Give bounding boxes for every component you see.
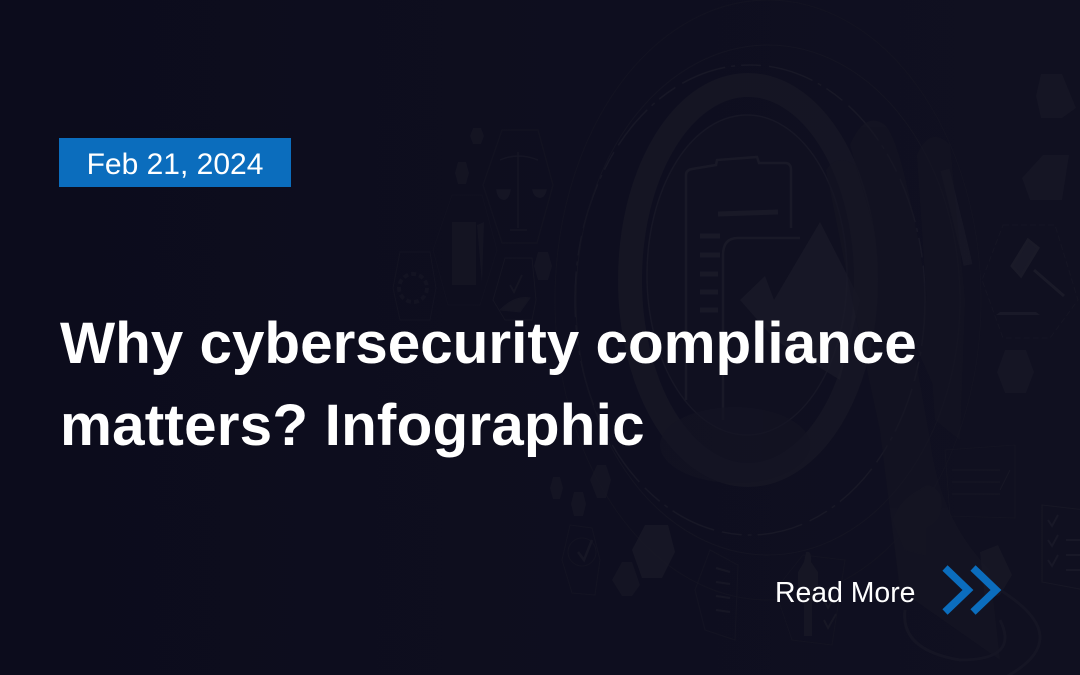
- central dial: [555, 0, 981, 600]
- read more label: Read More: [775, 577, 915, 609]
- left small hexagons: [455, 128, 675, 596]
- title: [60, 311, 917, 458]
- date badge: Feb 21, 2024: [87, 148, 263, 181]
- right hexagon column: [997, 74, 1076, 393]
- title: matters? Infographic: [60, 393, 645, 458]
- gavel icon: [982, 225, 1078, 338]
- books icon: [433, 195, 497, 305]
- hand with check icon: [493, 258, 536, 320]
- hand: [660, 120, 1000, 660]
- lower icons: magnifier, checklist, person, head, clipboard, checklist: [562, 445, 1080, 675]
- scales icon: [483, 130, 553, 243]
- icon: double chevron arrow: [942, 565, 1002, 615]
- gear badge icon: [393, 252, 436, 320]
- title: Why cybersecurity compliance: [60, 311, 917, 376]
- clipboard icon: [686, 157, 860, 420]
- date badge: [59, 138, 291, 187]
